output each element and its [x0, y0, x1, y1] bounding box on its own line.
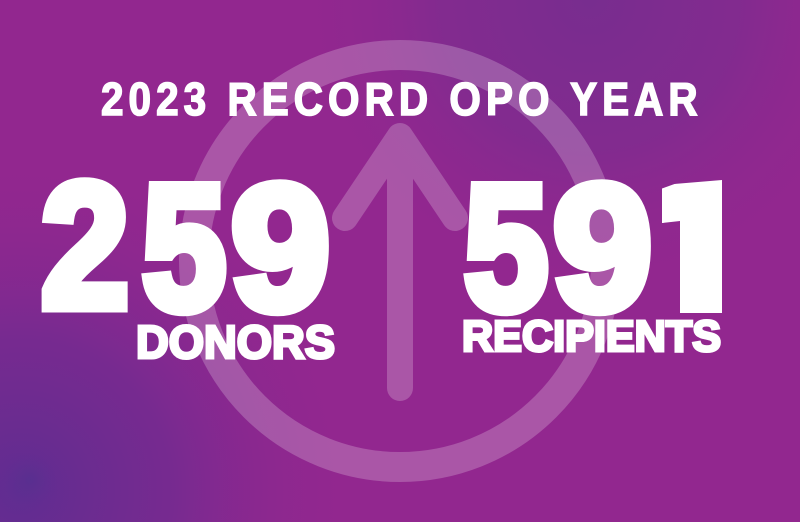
- donors count: 2: [41, 145, 129, 345]
- recipients count: [463, 179, 722, 316]
- recipients label: RECIPIENTS: [462, 312, 721, 361]
- recipients count: 9: [553, 148, 652, 347]
- recipients count: 1: [625, 151, 800, 350]
- title: 2023 RECORD OPO YEAR: [101, 75, 698, 126]
- recipients count: 5: [464, 148, 548, 348]
- donors count: [41, 145, 330, 348]
- icon: up arrow in circle: [194, 55, 606, 467]
- donors label: DONORS: [136, 316, 335, 368]
- donors count: 5: [142, 148, 226, 348]
- donors count: 9: [231, 148, 330, 347]
